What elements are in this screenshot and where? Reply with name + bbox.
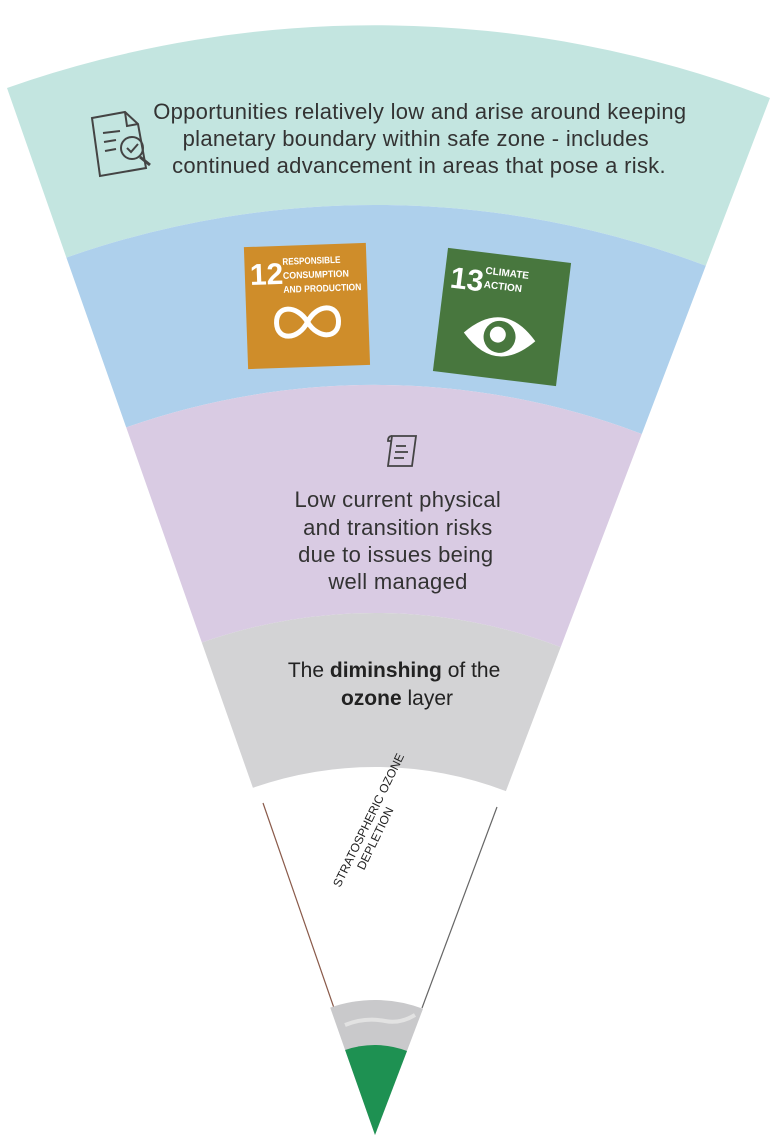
text: boundary description: ozone layer (341, 687, 453, 710)
panel: risks band (126, 385, 642, 647)
icon: SDG 12 tile: AND PRODUCTION (283, 282, 362, 296)
label: stratospheric ozone depletion: STRATOSPHERIC OZONE (330, 751, 407, 889)
icon: scroll (388, 436, 416, 466)
label: stratospheric ozone depletion: DEPLETION (354, 805, 396, 872)
icon: SDG 12 tile: CONSUMPTION (283, 269, 349, 282)
text: opportunities: continued advancement in areas that pose a risk. (172, 153, 666, 178)
icon: SDG 13 tile: ACTION (483, 280, 522, 295)
text: risks: Low current physical (295, 487, 501, 512)
text: risks: well managed (327, 569, 468, 594)
icon: SDG 13 tile: CLIMATE (485, 266, 530, 282)
text: opportunities: planetary boundary within safe zone - includes (183, 126, 649, 151)
panel: boundary band (202, 613, 561, 791)
text: opportunities: Opportunities relatively low and arise around keeping (153, 99, 686, 124)
panel: SDG band (66, 205, 706, 434)
icon: document with magnifier (92, 112, 150, 176)
icon: SDG 12 tile: 12 (249, 258, 284, 292)
icon: SDG 13 tile (433, 248, 571, 386)
icon: SDG 12 tile (244, 243, 370, 369)
panel: earth segment (263, 751, 497, 1135)
text: risks: and transition risks (303, 515, 492, 540)
text: risks: due to issues being (298, 542, 493, 567)
icon: globe (330, 1000, 423, 1135)
icon: SDG 13 tile: 13 (448, 262, 486, 298)
icon: SDG 12 tile: RESPONSIBLE (282, 255, 341, 268)
text: boundary description: The diminshing of the (288, 659, 500, 682)
panel: opportunities band (7, 25, 770, 266)
